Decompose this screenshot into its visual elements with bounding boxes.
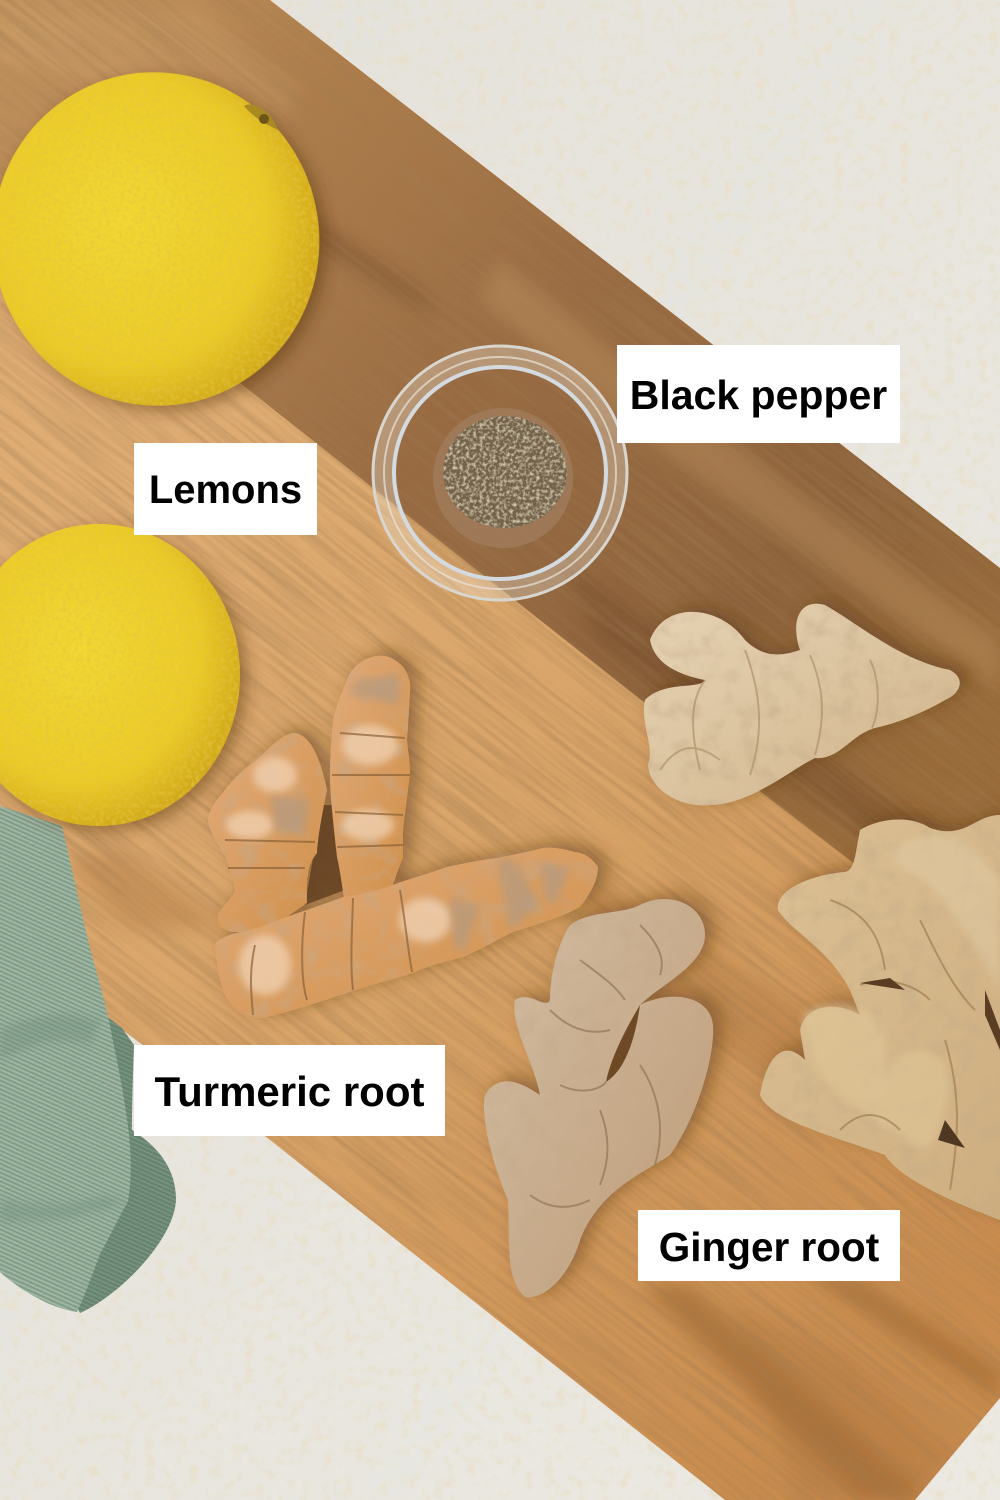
ginger centre bbox=[484, 899, 713, 1297]
label: Lemons: Lemons bbox=[149, 468, 302, 512]
ginger top right bbox=[644, 604, 960, 805]
label: Ginger root: Ginger root bbox=[659, 1224, 879, 1270]
label: Lemons bbox=[134, 443, 317, 535]
label: Ginger root bbox=[638, 1210, 900, 1281]
glass bowl with black pepper bbox=[373, 346, 627, 600]
towel bbox=[0, 806, 176, 1313]
label: Black pepper: Black pepper bbox=[630, 372, 887, 418]
turmeric bbox=[208, 656, 598, 1018]
label: Black pepper bbox=[617, 345, 900, 443]
lemon bottom bbox=[0, 524, 240, 826]
label: Turmeric root bbox=[134, 1045, 445, 1136]
ginger right cluster bbox=[760, 815, 1000, 1220]
label: Turmeric root: Turmeric root bbox=[155, 1068, 424, 1115]
lemon top bbox=[0, 36, 357, 442]
